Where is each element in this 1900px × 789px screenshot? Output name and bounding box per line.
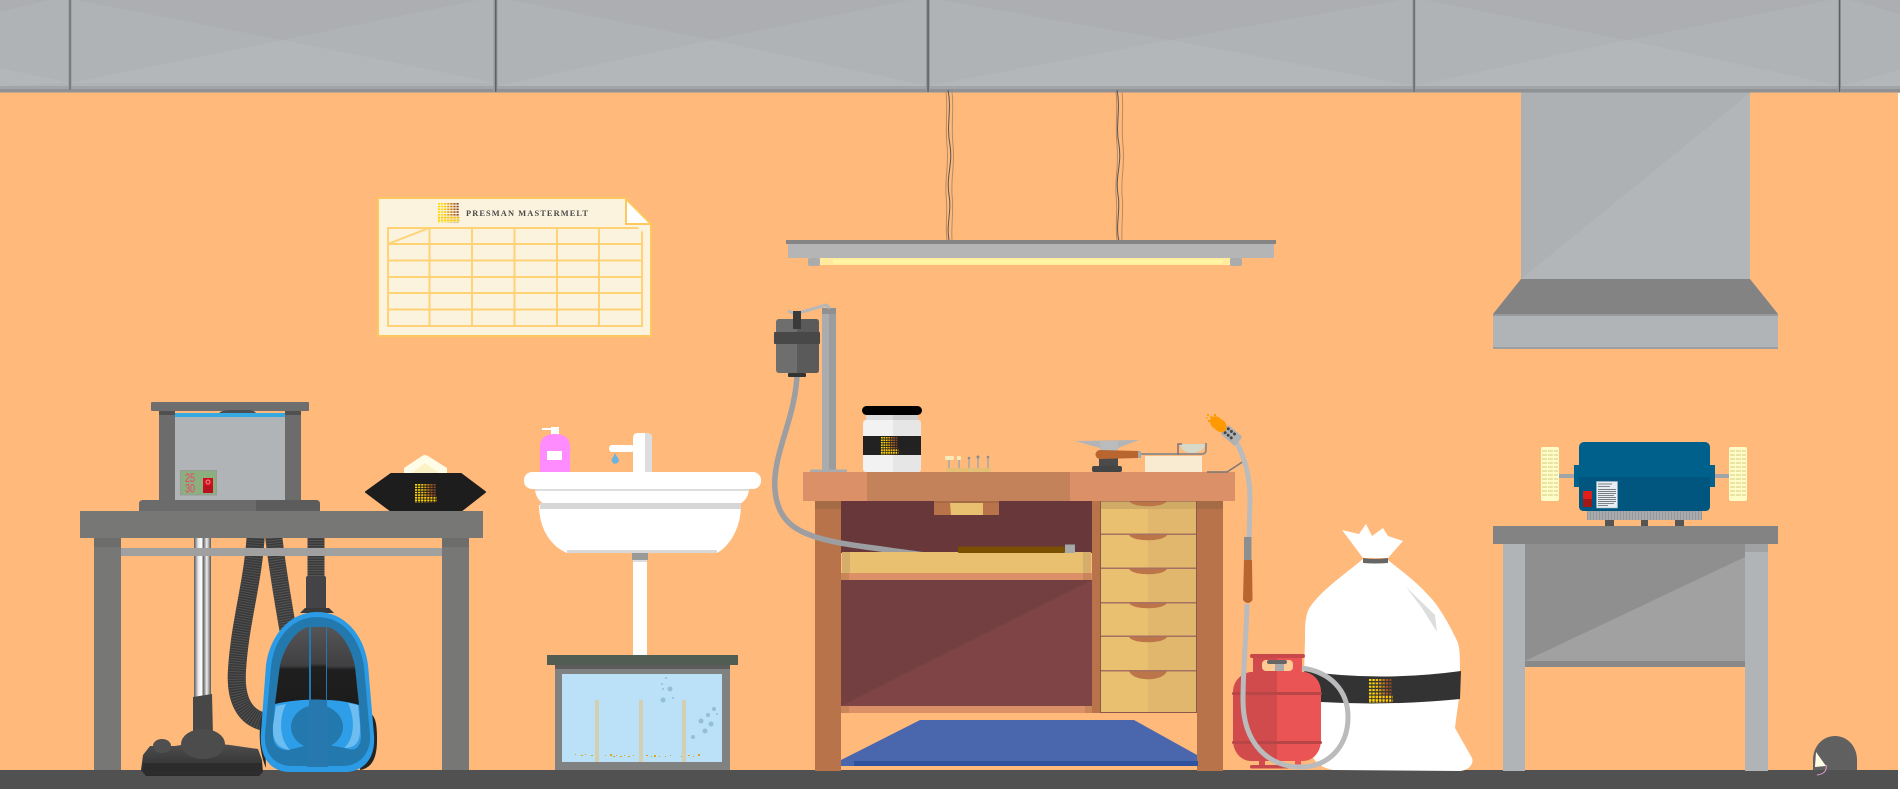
motor body (776, 319, 819, 373)
crucible holder wire (1141, 443, 1206, 454)
gas torch (1206, 414, 1348, 767)
cylinder body (1277, 672, 1321, 761)
vacuum handle (307, 700, 328, 767)
wash basin (524, 427, 761, 656)
tank sediment (575, 754, 700, 757)
sack body (1304, 559, 1472, 771)
hood slope (1493, 279, 1778, 314)
lamp end caps (808, 258, 820, 266)
jar label (863, 436, 921, 455)
bur rack (945, 456, 991, 472)
sack tie (1363, 558, 1388, 564)
cylinder collar (1253, 656, 1302, 676)
vacuum hoses (237, 530, 316, 722)
basin drain (632, 552, 648, 560)
left polishing wheel (1541, 447, 1559, 501)
basin pedestal (633, 560, 647, 656)
motor power switch (1583, 491, 1592, 499)
cleaner base (139, 500, 256, 511)
cleaner control panel (180, 470, 216, 495)
sack logo (1369, 679, 1393, 703)
bench legs (815, 500, 841, 771)
vacuum pipe socket (193, 694, 213, 735)
cleaner readout: 25 (185, 473, 195, 485)
water drop (612, 453, 619, 464)
vacuum floor nozzle (141, 742, 263, 776)
white jar (862, 406, 922, 472)
motor body (1579, 442, 1710, 511)
poster sheet (378, 198, 651, 336)
white block (1145, 456, 1202, 472)
ceiling lamp (786, 90, 1276, 266)
right polishing wheel (1729, 447, 1747, 501)
left table crossbar (121, 548, 442, 556)
poster logo (438, 203, 460, 223)
crucible bowl (1180, 444, 1205, 453)
right table top (1493, 526, 1778, 544)
tank rods (595, 700, 599, 762)
vacuum shell (261, 612, 374, 772)
wooden handle (1096, 450, 1138, 459)
motor fins (1587, 511, 1702, 520)
blue floor mat (841, 720, 1198, 766)
right edge strip (1898, 93, 1900, 789)
sack of material (1304, 524, 1472, 771)
hood duct highlight (1521, 93, 1750, 279)
cylinder feet (1259, 758, 1265, 767)
torch nozzle (1220, 425, 1243, 446)
torch hose (1235, 440, 1348, 767)
cleaner frame (159, 411, 175, 500)
right table legs (1503, 544, 1525, 771)
poster table grid (388, 228, 642, 326)
vacuum inner shell (265, 617, 370, 766)
basin collar (535, 488, 749, 504)
jar lid (862, 406, 922, 415)
wall chart poster (378, 198, 651, 336)
faucet (609, 433, 652, 473)
ceiling (0, 0, 1900, 92)
vacuum dome windows (275, 627, 309, 704)
flex shaft hose (775, 375, 925, 555)
small pull-out drawer (934, 500, 999, 515)
basin rim (524, 472, 761, 489)
bench back panels (841, 500, 1092, 553)
vacuum wheels (360, 712, 377, 770)
left table top (80, 511, 483, 538)
mouse hole (1813, 736, 1857, 770)
flex shaft motor stand (774, 305, 847, 472)
hood lip (1493, 314, 1778, 349)
jeweller's bench (775, 375, 1235, 771)
sack label band (1304, 671, 1461, 703)
soap pump (540, 427, 570, 472)
water tank (547, 655, 738, 770)
mouse hole with mouse (1813, 736, 1857, 775)
lamp wires (946, 90, 1124, 241)
tank lid (547, 655, 738, 665)
cylinder valve (1275, 663, 1284, 671)
sack fold (1406, 587, 1437, 632)
bench lower shelf (841, 706, 1092, 713)
tray body (366, 474, 485, 510)
vacuum cleaner (141, 530, 377, 776)
left table legs (94, 538, 121, 770)
tray handpiece (958, 544, 1075, 553)
mouse tail (1817, 765, 1826, 775)
vacuum metal pipe (194, 530, 211, 698)
motor shafts (1559, 474, 1575, 478)
motor bosses (1574, 465, 1580, 487)
tray logo (415, 484, 437, 502)
floor (0, 770, 1898, 789)
hood duct (1521, 92, 1750, 279)
stand arm (788, 305, 830, 314)
right table back panel (1525, 544, 1745, 661)
motor label (1596, 482, 1618, 508)
left workbench (80, 511, 483, 770)
ultrasonic cleaner (139, 402, 320, 511)
polishing motor (1541, 442, 1747, 526)
motor feet (1605, 520, 1614, 526)
tank bubbles (660, 677, 718, 739)
cheese (1815, 752, 1826, 767)
red gas cylinder (1232, 654, 1322, 768)
torch stand wire (1207, 461, 1244, 472)
stand pole (822, 308, 836, 472)
cleaner body (175, 413, 285, 500)
extractor hood (1493, 92, 1778, 349)
drawer handles (1129, 501, 1167, 679)
black ingot tray (366, 455, 485, 510)
torch wooden handle (1243, 560, 1252, 603)
tank water (562, 674, 722, 762)
cleaner power button (203, 478, 213, 493)
lamp housing (788, 244, 1274, 258)
anvil (1075, 440, 1139, 472)
right polishing table (1493, 526, 1778, 771)
tank shell (555, 669, 730, 770)
lamp tube (820, 258, 1230, 265)
vacuum neck (306, 576, 326, 612)
tray contents (404, 455, 447, 473)
ultrasonic cleaner: 30 (185, 484, 195, 496)
vacuum blue lower (273, 700, 361, 750)
bench top (803, 472, 1235, 501)
basin bowl (539, 505, 741, 553)
torch ferrule (1244, 537, 1252, 561)
poster folded corner (626, 199, 651, 224)
soldering block and crucible (1096, 443, 1206, 472)
sack tied top (1342, 524, 1403, 558)
bench tray (842, 552, 1091, 573)
drawer stack (1100, 501, 1196, 712)
poster title: PRESMAN MASTERMELT (466, 209, 589, 218)
torch flame (1206, 414, 1227, 432)
